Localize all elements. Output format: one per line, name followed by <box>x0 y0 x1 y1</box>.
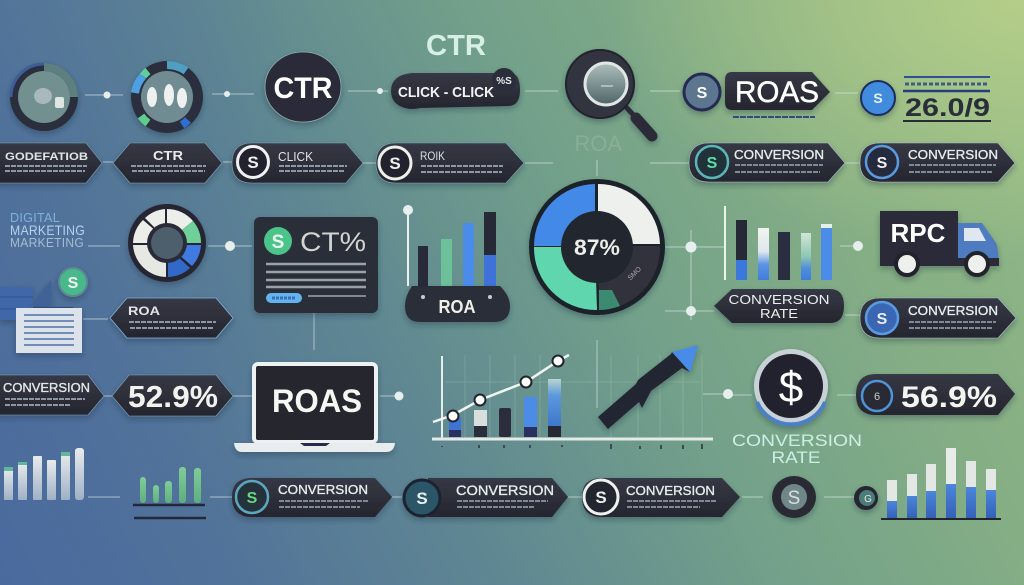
icon: laptop ROAS <box>234 364 395 452</box>
badge: CTR circle: CTR <box>274 72 333 105</box>
decorative blue underline <box>733 116 815 118</box>
arrow: growth <box>598 345 698 429</box>
plate: ROA <box>405 286 510 322</box>
icon: S coin: S <box>697 85 708 102</box>
pill: ROA <box>110 298 233 338</box>
pill: 56.9%: 56.9% <box>901 381 997 414</box>
pill: conversion bottom 2: S <box>416 489 428 508</box>
pill: click-click <box>391 68 520 109</box>
pie chart: 87% <box>529 179 665 315</box>
bar chart: green bars <box>133 467 206 518</box>
pill: conversion bottom 3 <box>582 478 740 517</box>
pill: click: CLICK <box>278 149 313 164</box>
pill: conversion blue coin: S <box>877 311 888 328</box>
badge: dollar coin <box>754 349 828 424</box>
pill: 56.9% <box>856 374 1015 415</box>
pill: conversion bottom 2 <box>404 478 568 517</box>
pill: conversion blue ring <box>860 143 1015 182</box>
label: conversion rate <box>732 431 862 467</box>
pie chart: 87%: SMO <box>627 265 643 282</box>
connector dots <box>104 88 863 400</box>
icon: document with folder and coin <box>0 268 87 353</box>
bar chart: conversion <box>725 206 832 280</box>
icon: coin bottom: S <box>788 488 800 509</box>
bar chart: grey bars <box>4 448 84 500</box>
faint label: ROA: ROA <box>574 131 622 156</box>
pill: conversion bottom 1: CONVERSION <box>278 482 368 497</box>
icon: RPC truck: RPC <box>890 218 946 248</box>
pill: ROA: ROA <box>128 304 160 318</box>
pie chart: 87%: 87% <box>574 235 620 260</box>
pill: conversion left: CONVERSION <box>3 380 90 395</box>
text: digital marketing: DIGITAL <box>10 210 60 225</box>
pill: click-click: %S <box>496 76 512 87</box>
pill: conversion blue coin <box>860 298 1016 338</box>
pill: click-click: CLICK - CLICK <box>398 84 494 101</box>
pill: conversion teal: S <box>707 155 718 172</box>
plate: ROA: ROA <box>438 297 476 317</box>
pill: ROIK: ROIK <box>420 149 445 163</box>
badge: dollar coin: $ <box>779 363 803 412</box>
pill: godefatiob: GODEFATIOB <box>5 151 88 163</box>
icon: coin bottom <box>772 476 816 518</box>
bar chart: ROA <box>408 210 496 286</box>
panel: CT% card <box>254 217 378 313</box>
line and bar chart <box>432 355 713 449</box>
pill: conversion blue ring: S <box>877 155 888 172</box>
panel: CT% card: CT% <box>300 227 366 257</box>
pill: conversion blue ring: CONVERSION <box>908 147 998 162</box>
faint grid <box>445 355 702 438</box>
icon: RPC truck <box>880 211 999 275</box>
connector lines <box>83 91 860 497</box>
pill: conversion left <box>0 375 104 415</box>
label: conversion rate: RATE <box>772 448 820 467</box>
pill: conversion rate: RATE <box>760 306 798 321</box>
text: digital marketing <box>10 210 85 250</box>
pill: godefatiob <box>0 143 102 183</box>
label: conversion rate: CONVERSION <box>732 431 862 450</box>
pill: conversion blue coin: CONVERSION <box>908 303 998 318</box>
icon: small gauge <box>854 486 878 510</box>
icon: document with folder and coin: S <box>68 275 79 292</box>
title: CTR: CTR <box>426 30 486 62</box>
icon: segmented wheel <box>128 204 206 282</box>
pill: ROAS: ROAS <box>735 76 819 109</box>
text: digital marketing: MARKETING <box>10 235 84 250</box>
icon: magnifying glass <box>566 50 652 136</box>
pill: 52.9%: 52.9% <box>128 379 218 414</box>
pill: conversion bottom 3: S <box>595 488 607 507</box>
icon: donut gauge 1 <box>10 63 78 131</box>
pill: conversion rate <box>714 289 844 323</box>
pill: conversion bottom 3: CONVERSION <box>626 483 715 498</box>
panel: CT% card: S <box>272 232 284 253</box>
icon: blue coin: S <box>873 90 883 106</box>
icon: blue coin <box>861 81 895 115</box>
pill: 56.9%: 6 <box>874 391 880 403</box>
icon: small gauge: G <box>864 494 872 505</box>
pill: conversion rate: CONVERSION <box>728 292 830 307</box>
pill: CTR: CTR <box>153 148 184 163</box>
metric: 26.0/9: 26.0/9 <box>905 94 990 122</box>
icon: laptop ROAS: ROAS <box>272 383 362 419</box>
pill: conversion bottom 2: CONVERSION <box>456 482 554 498</box>
bar chart: bottom right <box>881 448 1001 519</box>
text: digital marketing: MARKETING <box>10 222 85 238</box>
pill: ROIK <box>376 143 524 183</box>
pill: click <box>232 143 363 183</box>
icon: donut gauge 2 <box>131 61 203 133</box>
pill: conversion bottom 1: S <box>247 490 258 507</box>
badge: CTR circle <box>265 52 341 122</box>
pill: ROIK: S <box>389 154 401 173</box>
pill: CTR <box>113 143 222 183</box>
pill: conversion bottom 1 <box>232 478 392 517</box>
pill: conversion teal: CONVERSION <box>734 147 824 162</box>
pill: conversion teal <box>689 143 845 182</box>
pill: 52.9% <box>112 375 233 416</box>
icon: S coin <box>684 74 720 110</box>
pill: click: S <box>247 153 259 172</box>
metric: 26.0/9 <box>903 77 991 122</box>
